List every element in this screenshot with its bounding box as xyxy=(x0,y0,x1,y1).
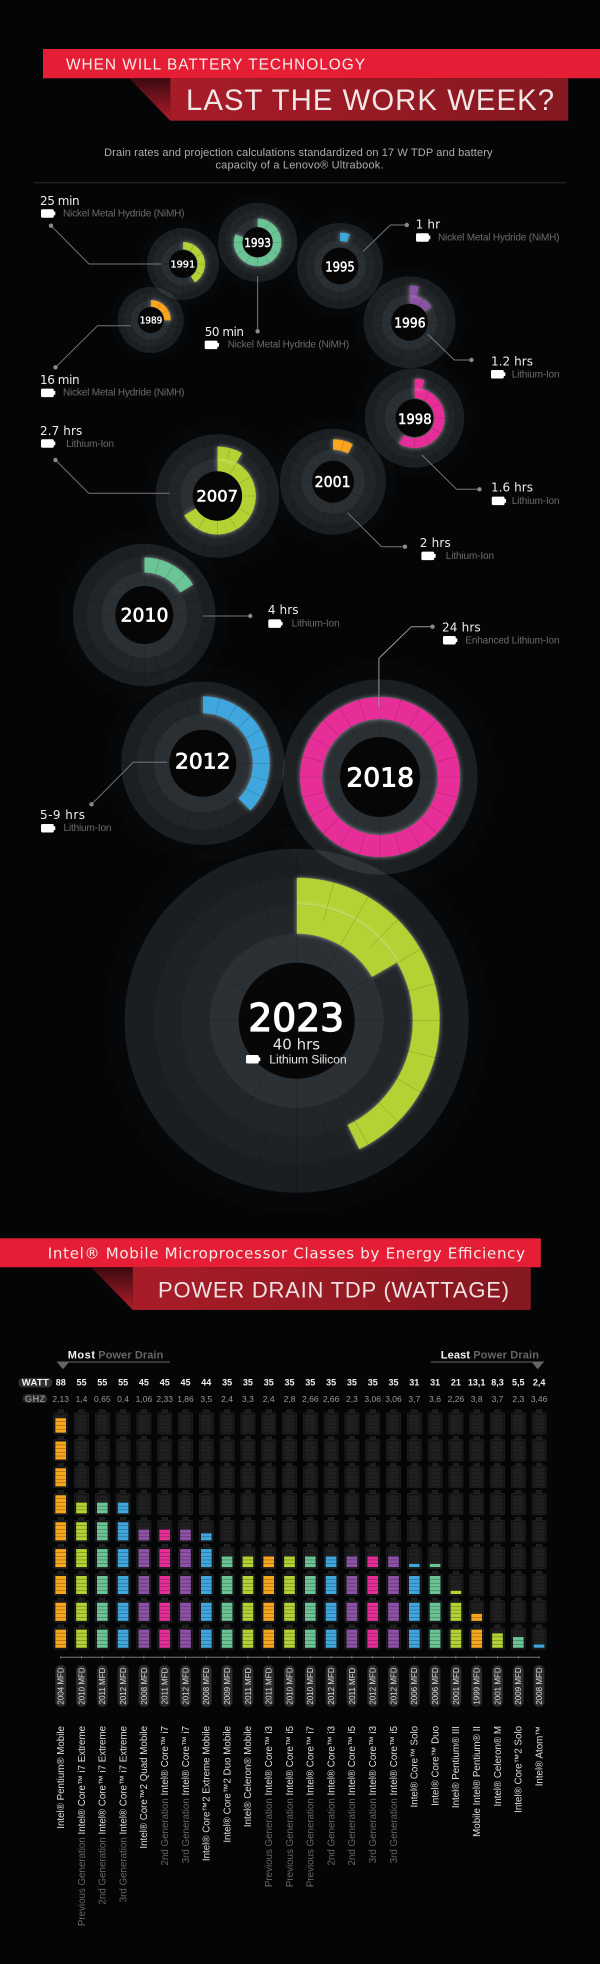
processor names: Previous Generation Intel® Core™ i5 xyxy=(285,1725,296,1887)
manufacture year pills: 2008 MFD xyxy=(202,1667,211,1705)
wheel: 2007: 2007 xyxy=(196,487,238,506)
row: watt values: 35 xyxy=(388,1377,399,1387)
callout: 50 min 1993 xyxy=(205,276,349,351)
manufacture year pills: 2011 MFD xyxy=(161,1667,170,1704)
processor names xyxy=(56,1725,545,1926)
wheel: 2010 xyxy=(59,530,230,700)
callout: 5-9 hrs 2012: 5-9 hrs xyxy=(40,808,85,822)
axis with ticks xyxy=(60,1656,540,1658)
wheel: 1993: 1993 xyxy=(244,236,271,250)
manufacture year pills: 2010 MFD xyxy=(306,1667,315,1705)
row: ghz values: 3,06 xyxy=(385,1394,402,1404)
legend: most power drain: Power Drain xyxy=(98,1350,164,1362)
row: ghz values: 3,6 xyxy=(429,1394,441,1404)
wheel: 2018 xyxy=(263,660,497,894)
manufacture year pills: 2010 MFD xyxy=(77,1667,86,1705)
callout: 16 min 1989 xyxy=(40,326,184,399)
wheel: 2023 lithium silicon 40 hrs: Lithium Silicon xyxy=(269,1052,347,1066)
processor names: Previous Generation Intel® Core™ i7 xyxy=(306,1726,317,1887)
row: ghz values: 0,65 xyxy=(94,1394,111,1404)
wheel: 1989: 1989 xyxy=(140,315,162,326)
legend: least power drain xyxy=(431,1350,544,1369)
row: ghz values: 1,06 xyxy=(136,1394,152,1404)
callout: 5-9 hrs 2012: Lithium-Ion xyxy=(64,823,111,834)
row: watt values: 45 xyxy=(139,1377,149,1387)
callout: 50 min 1993: Nickel Metal Hydride (NiMH) xyxy=(228,340,349,351)
row: watt values: WATT xyxy=(22,1378,49,1389)
wheel: 1998: 1998 xyxy=(398,411,432,428)
row: ghz values: 2,33 xyxy=(156,1394,173,1404)
wheel: 2018: 2018 xyxy=(346,764,414,794)
manufacture year pills: 2011 MFD xyxy=(98,1667,107,1704)
callout: 24 hrs 2018 xyxy=(379,621,560,707)
processor names: 2nd Generation Intel® Core™ i3 xyxy=(326,1726,337,1865)
section banner: power drain tdp xyxy=(91,1267,531,1310)
section banner: Intel mobile microprocessor classes: Intel® Mobile Microprocessor Classes by Energy Efficiency xyxy=(48,1244,525,1262)
row: watt values: 44 xyxy=(201,1377,211,1387)
processor names: 3rd Generation Intel® Core™ i7 xyxy=(181,1726,192,1863)
row: watt values: 31 xyxy=(430,1377,440,1387)
wheel: 2012: 2012 xyxy=(175,749,231,774)
callout: 25 min 1991: 25 min xyxy=(40,194,80,208)
processor names: Intel® Celeron® Mobile xyxy=(243,1726,254,1827)
manufacture year pills: 2008 MFD xyxy=(535,1667,544,1705)
wheel: 2023 lithium silicon 40 hrs: 2023 xyxy=(248,996,344,1040)
row: ghz values: 3,7 xyxy=(492,1394,504,1404)
legend: most power drain xyxy=(57,1350,170,1369)
callout: 25 min 1991: Nickel Metal Hydride (NiMH) xyxy=(63,209,184,220)
callout: 1 hr 1995: 1 hr xyxy=(416,218,440,232)
wheel: 1996 xyxy=(354,267,465,378)
row: ghz values: 1,86 xyxy=(177,1394,194,1404)
chart: battery grid of power drain xyxy=(54,1409,546,1649)
wheel: 1993 xyxy=(210,195,305,290)
manufacture year pills: 2012 MFD xyxy=(327,1667,336,1705)
processor names: Intel® Core™ Solo xyxy=(410,1725,421,1807)
manufacture year pills: 2001 MFD xyxy=(493,1667,502,1705)
processor names: Intel® Celeron® M xyxy=(493,1726,504,1806)
manufacture year pills: 2001 MFD xyxy=(452,1667,461,1705)
row: watt values: 35 xyxy=(305,1377,315,1387)
callout: 2.7 hrs 2007 xyxy=(40,424,170,493)
wheel: 2010: 2010 xyxy=(121,605,168,627)
row: ghz values: 3,46 xyxy=(531,1394,548,1404)
callout: 50 min 1993: 50 min xyxy=(205,325,244,339)
row: ghz values: 3,3 xyxy=(242,1394,254,1404)
callout: 24 hrs 2018: 24 hrs xyxy=(442,621,481,635)
manufacture year pills: 2009 MFD xyxy=(223,1667,232,1705)
wheel: 2001 xyxy=(269,418,397,545)
callout: 1.6 hrs 1998: 1.6 hrs xyxy=(491,481,533,495)
manufacture year pills: 2012 MFD xyxy=(181,1667,190,1705)
header banner: when will battery technology: WHEN WILL BATTERY TECHNOLOGY xyxy=(66,56,365,73)
callout: 25 min 1991 xyxy=(40,194,184,264)
intro text: Drain rates and projection calculations standardized on 17 W TDP and battery xyxy=(104,147,493,159)
processor names: 3rd Generation Intel® Core™ i3 xyxy=(368,1726,379,1863)
processor names: Previous Generation Intel® Core™ i7 Extreme xyxy=(77,1726,88,1926)
wheel: 2023 lithium silicon 40 hrs xyxy=(104,828,489,1213)
row: ghz values: GHZ xyxy=(25,1394,45,1405)
manufacture year pills: 2011 MFD xyxy=(244,1667,253,1704)
callout: 1.6 hrs 1998 xyxy=(422,455,560,507)
row: watt values: 8,3 xyxy=(491,1377,504,1387)
manufacture year pills: 2006 MFD xyxy=(410,1667,419,1705)
wheel: 1989 xyxy=(111,280,190,360)
row: watt values: 21 xyxy=(451,1377,461,1387)
section banner: Intel mobile microprocessor classes xyxy=(0,1238,541,1267)
wheel: 1996: 1996 xyxy=(394,315,426,331)
row: watt values: 35 xyxy=(264,1377,274,1387)
header banner: last the work week xyxy=(129,78,568,121)
callout: 1.2 hrs 1996: Lithium-Ion xyxy=(512,369,560,380)
row: watt values xyxy=(18,1377,545,1389)
manufacture year pills xyxy=(55,1665,545,1707)
processor names: Mobile Intel® Pentium® II xyxy=(472,1726,483,1837)
manufacture year pills: 2012 MFD xyxy=(369,1667,378,1705)
manufacture year pills: 2011 MFD xyxy=(265,1667,274,1704)
header banner: when will battery technology xyxy=(43,49,600,78)
row: ghz values: 0,4 xyxy=(117,1394,129,1404)
manufacture year pills: 2004 MFD xyxy=(57,1667,66,1705)
row: watt values: 35 xyxy=(368,1377,378,1387)
callout: 4 hrs 2010 xyxy=(203,603,340,629)
callout: 1 hr 1995 xyxy=(363,218,560,252)
row: watt values: 35 xyxy=(326,1377,336,1387)
row: watt values: 55 xyxy=(76,1377,87,1387)
callout: 5-9 hrs 2012 xyxy=(40,762,167,834)
wheel: 2023 lithium silicon 40 hrs: 40 hrs xyxy=(273,1035,320,1053)
row: watt values: 55 xyxy=(118,1377,128,1387)
processor names: Intel® Core™2 Duo Mobile xyxy=(222,1726,233,1843)
row: ghz values: 2,8 xyxy=(284,1394,296,1404)
row: watt values: 31 xyxy=(409,1377,419,1387)
callout: 2 hrs 2001: 2 hrs xyxy=(420,536,451,550)
row: watt values: 45 xyxy=(180,1377,191,1387)
row: watt values: 2,4 xyxy=(533,1377,545,1387)
manufacture year pills: 1999 MFD xyxy=(473,1667,482,1705)
callout: 4 hrs 2010: Lithium-Ion xyxy=(292,618,340,629)
processor names: Intel® Pentium® Mobile xyxy=(56,1726,67,1829)
row: watt values: 35 xyxy=(284,1377,295,1387)
manufacture year pills: 2012 MFD xyxy=(389,1667,398,1705)
processor names: 3rd Generation Intel® Core™ i7 Extreme xyxy=(118,1726,129,1902)
row: watt values: 35 xyxy=(222,1377,232,1387)
row: watt values: 45 xyxy=(160,1377,170,1387)
wheel: 1995: 1995 xyxy=(325,260,355,275)
wheel: 2012 xyxy=(105,665,301,861)
legend: least power drain: Least xyxy=(441,1350,470,1362)
callout: 2 hrs 2001: Lithium-Ion xyxy=(446,551,494,562)
callout: 1.6 hrs 1998: Lithium-Ion xyxy=(512,496,560,507)
processor names: Intel® Core™2 Quad Mobile xyxy=(139,1726,150,1849)
callout: 1.2 hrs 1996 xyxy=(428,334,560,380)
header banner: last the work week: LAST THE WORK WEEK? xyxy=(186,84,554,117)
row: ghz values: 3,7 xyxy=(408,1394,420,1404)
row: ghz values: 3,06 xyxy=(364,1394,381,1404)
row: ghz values: 1,4 xyxy=(76,1394,88,1404)
row: ghz values: 3,8 xyxy=(471,1394,483,1404)
manufacture year pills: 2011 MFD xyxy=(348,1667,357,1704)
wheel: 2001: 2001 xyxy=(315,473,351,491)
row: watt values: 35 xyxy=(243,1377,253,1387)
row: ghz values xyxy=(23,1394,548,1405)
callout: 16 min 1989: 16 min xyxy=(40,373,80,387)
row: ghz values: 3,5 xyxy=(200,1394,212,1404)
processor names: 2nd Generation Intel® Core™ i5 xyxy=(347,1725,358,1865)
callout: 4 hrs 2010: 4 hrs xyxy=(268,603,298,617)
manufacture year pills: 2008 MFD xyxy=(140,1667,149,1705)
row: watt values: 35 xyxy=(347,1377,357,1387)
row: ghz values: 2,4 xyxy=(263,1394,275,1404)
legend: most power drain: Most xyxy=(68,1350,95,1362)
row: ghz values: 2,66 xyxy=(302,1394,319,1404)
processor names: Previous Generation Intel® Core™ i3 xyxy=(264,1726,275,1887)
intro text xyxy=(104,147,493,172)
wheel: 1991 xyxy=(140,221,226,307)
callout: 16 min 1989: Nickel Metal Hydride (NiMH) xyxy=(63,388,184,399)
callout: 24 hrs 2018: Enhanced Lithium-Ion xyxy=(465,636,560,647)
intro text: capacity of a Lenovo® Ultrabook. xyxy=(216,160,384,172)
callout: 1 hr 1995: Nickel Metal Hydride (NiMH) xyxy=(438,233,560,244)
wheel: 1995 xyxy=(288,214,392,318)
wheel: 2007 xyxy=(143,422,292,570)
row: watt values: 55 xyxy=(97,1377,107,1387)
callout: 2.7 hrs 2007: 2.7 hrs xyxy=(40,424,82,438)
processor names: Intel® Core™2 Extreme Mobile xyxy=(202,1726,213,1861)
wheel: 1998 xyxy=(355,358,474,478)
processor names: 3rd Generation Intel® Core™ i5 xyxy=(389,1725,400,1863)
section banner: power drain tdp: POWER DRAIN TDP (WATTAGE) xyxy=(158,1278,509,1303)
row: ghz values: 2,26 xyxy=(448,1394,464,1404)
row: ghz values: 2,13 xyxy=(52,1394,69,1404)
processor names: Intel® Core™ Duo xyxy=(430,1725,441,1806)
manufacture year pills: 2010 MFD xyxy=(285,1667,294,1705)
processor names: Intel® Pentium® III xyxy=(451,1726,462,1808)
row: ghz values: 2,3 xyxy=(512,1394,524,1404)
row: ghz values: 2,66 xyxy=(323,1394,340,1404)
row: ghz values: 2,4 xyxy=(221,1394,233,1404)
processor names: Intel® Atom™ xyxy=(534,1726,545,1786)
wheel: 1991: 1991 xyxy=(170,260,195,271)
callout: 2.7 hrs 2007: Lithium-Ion xyxy=(66,439,114,450)
row: ghz values: 2,3 xyxy=(346,1394,358,1404)
processor names: 2nd Generation Intel® Core™ i7 Extreme xyxy=(98,1726,109,1904)
row: watt values: 13,1 xyxy=(468,1377,485,1387)
processor names: Intel® Core™2 Solo xyxy=(514,1725,525,1813)
manufacture year pills: 2012 MFD xyxy=(119,1667,128,1705)
callout: 1.2 hrs 1996: 1.2 hrs xyxy=(491,354,533,368)
manufacture year pills: 2006 MFD xyxy=(431,1667,440,1705)
callout: 2 hrs 2001 xyxy=(348,513,494,562)
row: watt values: 88 xyxy=(56,1377,66,1387)
row: watt values: 5,5 xyxy=(512,1377,525,1387)
manufacture year pills: 2009 MFD xyxy=(514,1667,523,1705)
legend: least power drain: Power Drain xyxy=(473,1350,539,1362)
processor names: 2nd Generation Intel® Core™ i7 xyxy=(160,1726,171,1865)
